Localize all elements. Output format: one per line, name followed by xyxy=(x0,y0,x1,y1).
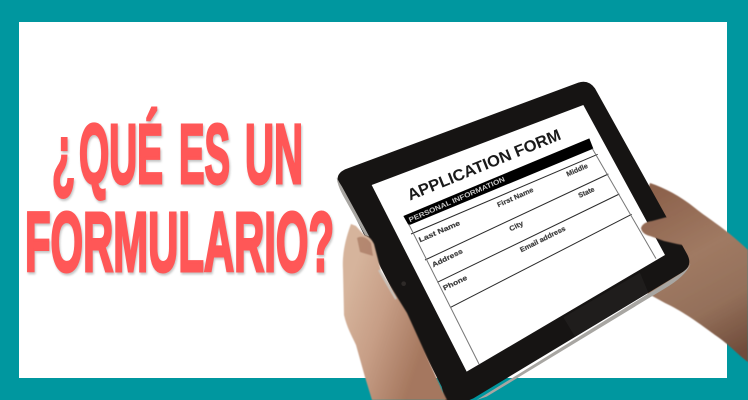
form field labels: Last Name xyxy=(418,220,462,244)
title: ES xyxy=(179,107,230,201)
title: UN xyxy=(245,107,303,201)
title: ES xyxy=(180,109,231,203)
tablet edge over palm xyxy=(379,270,396,299)
tablet body xyxy=(338,82,689,400)
tablet home button xyxy=(401,281,406,286)
form heading: APPLICATION FORM xyxy=(405,127,563,204)
thumb nail shade xyxy=(357,237,373,256)
right hand xyxy=(640,183,748,362)
title: UN xyxy=(246,109,304,203)
form field labels: State xyxy=(578,186,596,200)
form lines xyxy=(409,149,656,364)
title: QUÉ xyxy=(79,107,163,201)
form field labels xyxy=(418,163,596,292)
title: ¿ xyxy=(53,109,76,203)
title: QUÉ xyxy=(80,109,164,203)
infographic canvas: FORMULARIO? xyxy=(26,197,335,291)
tablet silver rim xyxy=(337,177,691,400)
section bar xyxy=(403,138,593,225)
form field labels: Middle xyxy=(566,163,589,178)
tablet bezel gloss xyxy=(563,273,648,337)
form field labels: Email address xyxy=(519,225,567,254)
left hand xyxy=(343,224,447,400)
tablet screen xyxy=(372,105,665,372)
form field labels: City xyxy=(508,220,525,233)
infographic canvas: FORMULARIO? xyxy=(25,195,334,289)
form field labels: Address xyxy=(431,248,464,269)
title: ¿ xyxy=(52,107,75,201)
form field labels: Phone xyxy=(442,275,469,292)
title xyxy=(25,107,335,291)
section bar label: PERSONAL INFORMATION xyxy=(408,176,506,224)
form field labels: First Name xyxy=(496,187,535,209)
tablet xyxy=(337,82,691,400)
right thumb xyxy=(641,215,728,262)
